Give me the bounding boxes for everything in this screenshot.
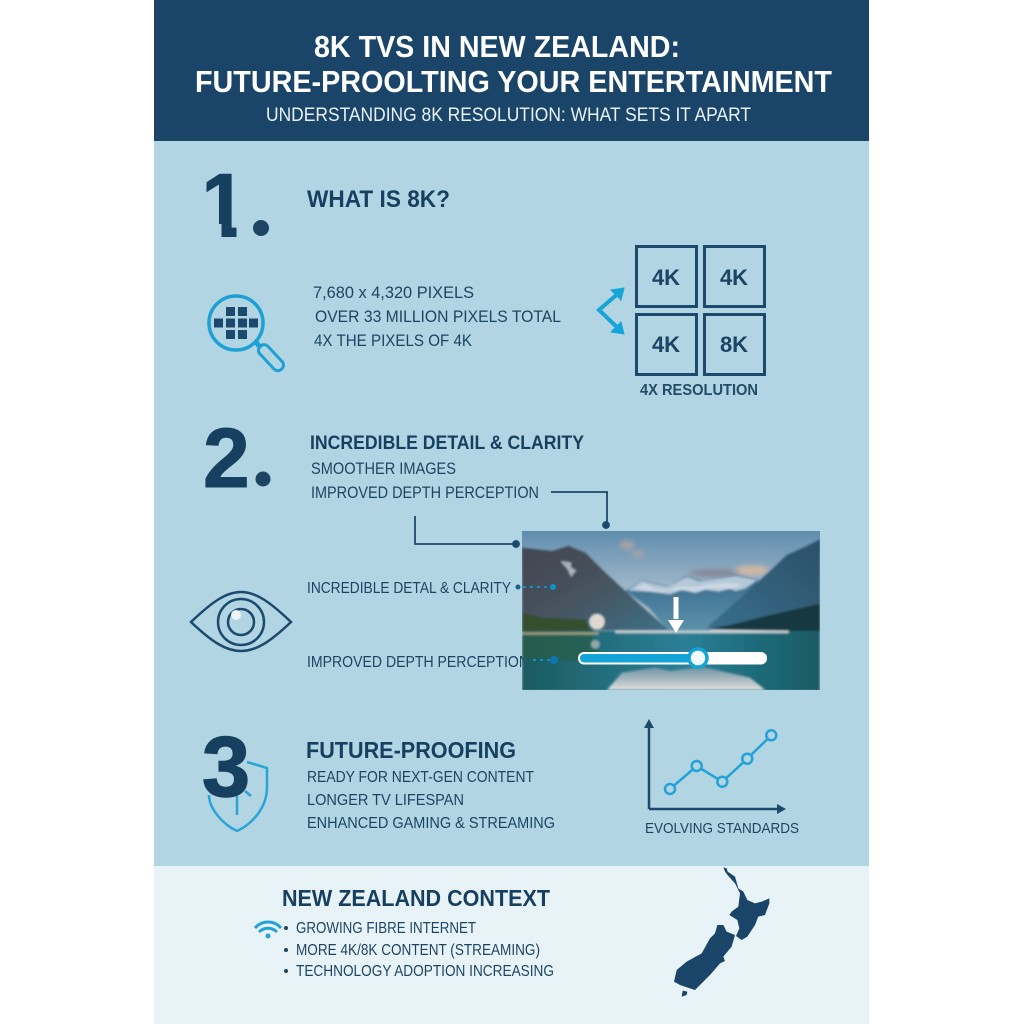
callout labels: IMPROVED DEPTH PERCEPTION bbox=[307, 654, 529, 671]
lake bbox=[522, 631, 820, 691]
number 3: 3 bbox=[202, 720, 250, 815]
diagram: 4K grid: 4K bbox=[652, 332, 680, 357]
text block: pixel facts bbox=[313, 283, 561, 350]
image: mountain lake photo bbox=[522, 531, 820, 691]
panel: New Zealand context bbox=[154, 866, 869, 1024]
text block: benefits: IMPROVED DEPTH PERCEPTION bbox=[311, 483, 539, 502]
sky bbox=[522, 531, 820, 631]
line chart bbox=[644, 719, 786, 814]
text block: benefits: SMOOTHER IMAGES bbox=[311, 459, 456, 478]
left forest bbox=[522, 613, 599, 633]
number 1 bbox=[190, 155, 269, 257]
text block: future-proofing benefits bbox=[307, 769, 555, 832]
distant valley bbox=[625, 575, 759, 631]
text block: pixel facts: OVER 33 MILLION PIXELS TOTAL bbox=[315, 307, 561, 326]
callout labels bbox=[307, 580, 529, 671]
bullet list: GROWING FIBRE INTERNET bbox=[296, 920, 476, 937]
callout labels: INCREDIBLE DETAL & CLARITY bbox=[307, 580, 511, 597]
bullet list bbox=[284, 920, 554, 980]
diagram: 4K grid: 8K bbox=[720, 332, 748, 357]
snow peaks bbox=[628, 576, 757, 594]
map: New Zealand bbox=[674, 867, 769, 997]
number 2: 2 bbox=[203, 411, 250, 505]
panel: section 1 what is 8K bbox=[190, 155, 764, 399]
diagram: 4K grid bbox=[636, 246, 764, 374]
subtitle: UNDERSTANDING 8K RESOLUTION: WHAT SETS IT APART bbox=[266, 104, 751, 126]
slider bbox=[578, 649, 767, 667]
panel: page background bbox=[154, 141, 869, 866]
icon: magnifier with pixels bbox=[209, 296, 286, 373]
left mountain snow bbox=[560, 561, 576, 577]
bullet list: MORE 4K/8K CONTENT (STREAMING) bbox=[296, 942, 540, 959]
label: 4x resolution: 4X RESOLUTION bbox=[640, 382, 758, 399]
dotted leaders bbox=[516, 584, 558, 664]
shore highlight bbox=[615, 631, 789, 633]
panel: section 3 future proofing bbox=[202, 719, 799, 837]
connector lines bbox=[415, 492, 609, 547]
diagram: 4K grid: 4K bbox=[720, 265, 748, 290]
number 1: 1 bbox=[198, 155, 249, 257]
icon: double arrow bbox=[599, 288, 624, 334]
right mountain bbox=[707, 539, 820, 630]
heading: New Zealand context: NEW ZEALAND CONTEXT bbox=[282, 885, 550, 911]
number 2 bbox=[203, 411, 270, 505]
text block: future-proofing benefits: ENHANCED GAMING & STREAMING bbox=[307, 815, 555, 832]
blurred glare bbox=[589, 614, 605, 630]
heading: what is 8K: WHAT IS 8K? bbox=[307, 186, 450, 213]
text block: future-proofing benefits: READY FOR NEXT-GEN CONTENT bbox=[307, 769, 534, 786]
text block: pixel facts: 7,680 x 4,320 PIXELS bbox=[313, 283, 474, 302]
left mountain bbox=[522, 546, 669, 630]
panel: header bbox=[154, 0, 869, 141]
right forest bbox=[707, 604, 820, 632]
text block: future-proofing benefits: LONGER TV LIFESPAN bbox=[307, 792, 464, 809]
heading: incredible detail: INCREDIBLE DETAIL & CLARITY bbox=[310, 433, 584, 454]
diagram: 4K grid: 4K bbox=[652, 265, 680, 290]
icon: eye bbox=[191, 592, 291, 651]
clouds bbox=[620, 541, 769, 577]
bullet list: TECHNOLOGY ADOPTION INCREASING bbox=[296, 963, 554, 980]
icon: wifi bbox=[255, 922, 281, 938]
text block: pixel facts: 4X THE PIXELS OF 4K bbox=[314, 331, 473, 350]
lake reflection bbox=[607, 667, 765, 690]
text block: benefits bbox=[311, 459, 539, 502]
title line 2: FUTURE-PROOLTING YOUR ENTERTAINMENT bbox=[195, 64, 832, 99]
title line 1: 8K TVS IN NEW ZEALAND: bbox=[314, 29, 680, 64]
panel: section 2 detail and clarity bbox=[191, 411, 820, 691]
icon: shield bbox=[209, 762, 267, 831]
chart label: EVOLVING STANDARDS bbox=[645, 820, 799, 837]
icon: white down arrow bbox=[668, 597, 684, 633]
heading: future-proofing: FUTURE-PROOFING bbox=[306, 737, 516, 763]
